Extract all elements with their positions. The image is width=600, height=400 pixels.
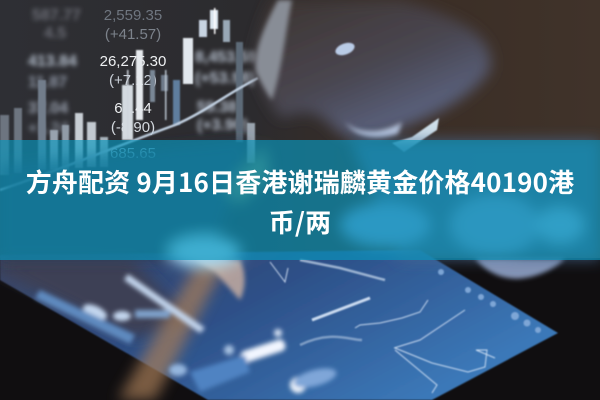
- trend line: [0, 78, 258, 190]
- sharp ticker values: (-8.90): [111, 119, 155, 136]
- sharp ticker values: [100, 7, 166, 162]
- tablet chart lines: [270, 260, 495, 393]
- blurred ticker values: 4.5: [44, 25, 66, 42]
- blurred ticker values: (+53.98): [195, 70, 255, 87]
- blurred ticker values: 413.84: [28, 53, 77, 70]
- lower dark base: [0, 258, 600, 400]
- title: 方舟配资 9月16日香港谢瑞麟黄金价格40190港币/两: [26, 163, 574, 240]
- blurred ticker values: +1.24: [28, 120, 69, 137]
- tablet edge dots: [438, 269, 541, 333]
- hand and finger: [255, 0, 491, 152]
- glowing light streak: [118, 258, 228, 400]
- blurred ticker values: 37.04: [28, 100, 68, 117]
- reflected hand glow behind banner: [0, 140, 600, 268]
- sharp ticker values: 685.65: [110, 145, 156, 162]
- tablet screen: [0, 250, 558, 400]
- blurred ticker values: [28, 7, 257, 137]
- sharp ticker values: 68.44: [114, 100, 152, 117]
- blurred ticker values: 11.87: [28, 74, 67, 91]
- sharp ticker values: (+7.12): [109, 72, 157, 89]
- blurred ticker values: 587.77: [32, 7, 81, 24]
- candlestick chart: [0, 8, 255, 175]
- fingertip reflection: [475, 258, 565, 279]
- sharp ticker values: 2,559.35: [104, 7, 162, 24]
- blurred ticker values: 59.38: [197, 99, 237, 116]
- blurred ticker values: (+3.90): [197, 117, 248, 134]
- blurred ticker values: 8,453.59: [195, 49, 257, 66]
- sharp ticker values: (+41.57): [105, 26, 161, 43]
- sharp ticker values: 26,275.30: [100, 53, 166, 70]
- banner: translucent teal band: [0, 140, 600, 260]
- blurred tablet data bars: [35, 274, 338, 393]
